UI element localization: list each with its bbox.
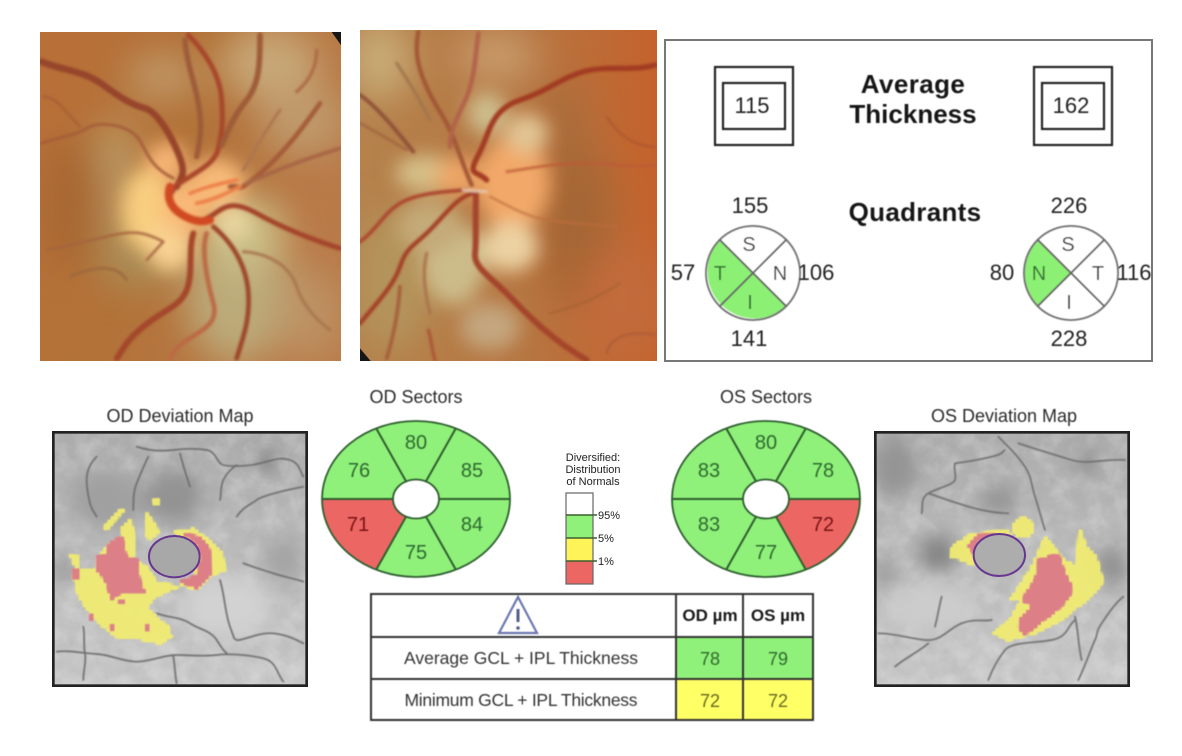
heading: average thickness: Thickness — [849, 99, 977, 129]
row: average thickness — [404, 648, 788, 669]
row: minimum thickness: 72 — [768, 691, 788, 711]
OD quadrant circle: N — [773, 263, 787, 285]
title: OD deviation map: OD Deviation Map — [106, 406, 254, 426]
OD sector chart: 84 — [461, 514, 483, 536]
row: minimum thickness: Minimum GCL + IPL Thickness — [404, 690, 638, 710]
dark corner of photo — [332, 32, 342, 46]
table headers: OS µm — [751, 606, 805, 625]
OD quadrant circle: I — [747, 292, 753, 314]
OD average thickness value — [715, 67, 793, 145]
table headers: OD µm — [682, 606, 738, 625]
heading: average thickness — [849, 69, 977, 129]
fundus photo: left eye optic disc — [360, 30, 657, 361]
OD quadrant circle: T — [714, 263, 726, 285]
dark corner of photo — [360, 348, 371, 361]
OS quadrant circle: S — [1061, 234, 1075, 256]
OS sector chart: 80 — [755, 432, 777, 454]
OS sector chart: 72 — [812, 514, 834, 536]
OD quadrant values: 106 — [798, 260, 834, 285]
title: OS deviation map: OS Deviation Map — [931, 406, 1077, 426]
title: OD sectors: OD Sectors — [369, 387, 463, 407]
legend: distribution of normals: Diversified: — [566, 452, 620, 464]
OS quadrant circle: N — [1032, 263, 1046, 285]
fundus vessels — [42, 35, 340, 358]
title: OS sectors: OS Sectors — [720, 387, 812, 407]
row: average thickness: Average GCL + IPL Thickness — [404, 648, 638, 668]
OS quadrant values: 226 — [1051, 193, 1087, 218]
legend: distribution of normals: of Normals — [566, 476, 620, 488]
icon: warning triangle — [499, 597, 537, 633]
OD quadrant values — [671, 193, 834, 351]
OS average thickness value: 162 — [1053, 93, 1089, 118]
OD quadrant circle: S — [742, 234, 756, 256]
heading: quadrants: Quadrants — [849, 197, 981, 227]
OD deviation map — [52, 431, 308, 687]
OS sector chart: 78 — [812, 460, 834, 482]
OD quadrant values: 57 — [671, 260, 695, 285]
OS quadrant circle — [1024, 226, 1118, 320]
legend: distribution of normals: 5% — [598, 533, 614, 545]
OD average thickness value: 115 — [734, 93, 770, 118]
OS quadrant circle: I — [1066, 292, 1072, 314]
row: minimum thickness: 72 — [700, 691, 720, 711]
legend: distribution of normals: Distribution — [565, 464, 621, 476]
legend: distribution of normals — [565, 452, 621, 585]
OS average thickness value — [1034, 67, 1112, 145]
OS deviation map — [874, 431, 1130, 687]
row: minimum thickness — [404, 690, 788, 711]
OS quadrant circle: T — [1092, 263, 1104, 285]
OD sector chart: 85 — [461, 460, 483, 482]
purple fovea ellipse — [974, 534, 1025, 576]
row: average thickness: 79 — [768, 649, 788, 669]
OD sector chart — [320, 419, 512, 579]
OD sector chart: 75 — [405, 542, 427, 564]
table: GCL + IPL thickness — [369, 592, 815, 722]
OS sector chart: 83 — [698, 460, 720, 482]
map vessels — [878, 437, 1125, 680]
OD sector chart: 80 — [405, 432, 427, 454]
OD sector chart: 76 — [348, 460, 370, 482]
row: average thickness: 78 — [700, 649, 720, 669]
OS quadrant values — [990, 193, 1152, 351]
OD quadrant circle — [706, 226, 800, 320]
legend: distribution of normals: 1% — [598, 556, 614, 568]
OS quadrant values: 80 — [990, 260, 1014, 285]
red 1 percent zone — [968, 534, 1073, 635]
yellow 5 percent zone — [951, 518, 1103, 641]
fundus photo: right eye optic disc — [40, 32, 341, 361]
OS sector chart: 83 — [698, 514, 720, 536]
OS sector chart: 77 — [755, 542, 777, 564]
OS quadrant values: 228 — [1051, 326, 1087, 351]
legend: distribution of normals: 95% — [598, 510, 620, 522]
table headers — [682, 606, 805, 625]
OD sector chart: 71 — [347, 514, 369, 536]
purple fovea ellipse — [149, 536, 200, 577]
heading: average thickness: Average — [861, 69, 965, 99]
map vessels — [57, 447, 303, 683]
OD quadrant values: 155 — [732, 193, 768, 218]
panel: average thickness and quadrants — [664, 39, 1153, 362]
red 1 percent zone — [73, 533, 211, 630]
OD quadrant values: 141 — [731, 326, 767, 351]
OS quadrant values: 116 — [1116, 260, 1152, 285]
OS sector chart — [670, 419, 862, 579]
yellow 5 percent zone — [70, 498, 225, 644]
fundus vessels — [360, 32, 655, 360]
